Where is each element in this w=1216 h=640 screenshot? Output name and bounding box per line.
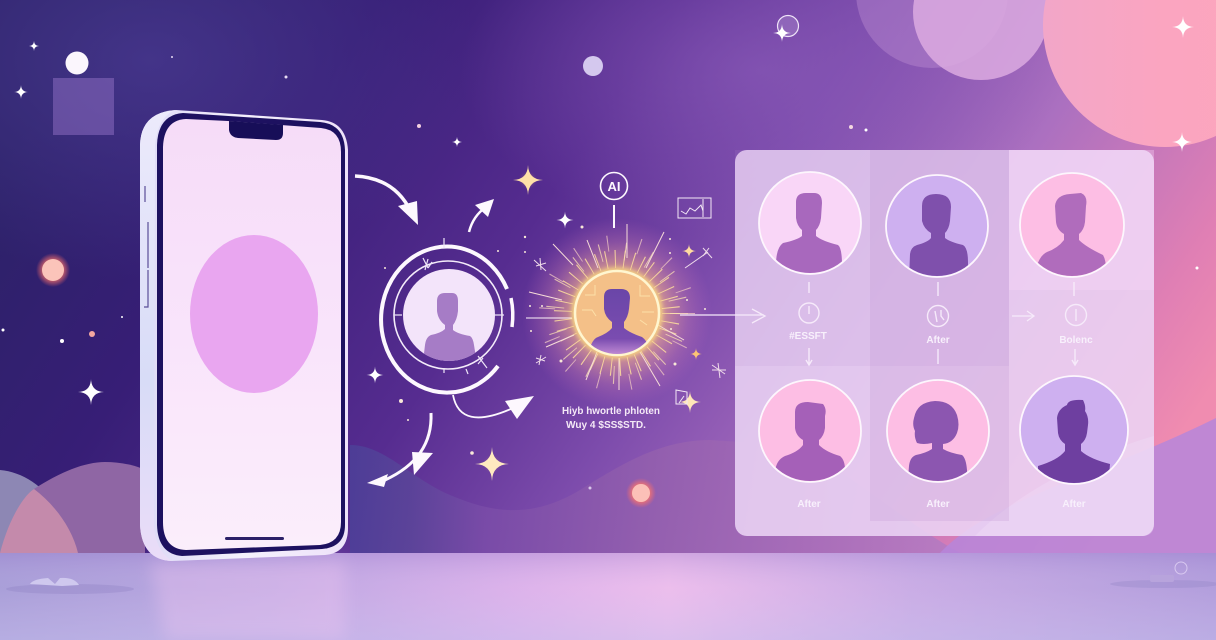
ring ticks: [394, 238, 504, 374]
arrow: down and left: [367, 413, 433, 487]
middle ring: [394, 261, 502, 369]
AI glow core: [526, 224, 703, 400]
panel wave: [975, 436, 1154, 536]
arrow: under ring to the right: [453, 395, 534, 419]
bokeh dots: [2, 16, 1198, 508]
sparkle dots around core: [384, 226, 706, 455]
portrait 4: [759, 380, 861, 490]
phone bezel: [157, 113, 345, 556]
outer ring: [381, 247, 507, 393]
phone notch: [229, 121, 283, 140]
AI badge: [600, 172, 628, 228]
AI badge: AI: [608, 179, 620, 194]
before profile ring: [381, 238, 513, 393]
after label 2: After: [926, 499, 950, 510]
right column tint: [1009, 150, 1154, 290]
step 2 label: After: [926, 335, 950, 346]
panel background: [735, 150, 1154, 536]
top row tint: [735, 150, 1009, 366]
phone: [140, 110, 348, 561]
caption text: Hiyb hwortle phloten: [562, 405, 660, 417]
radial rays short: [563, 259, 671, 367]
decorative bokeh square: [53, 78, 114, 135]
arrow: up right from ring: [469, 199, 494, 232]
step 1 label: #ESSFT: [789, 331, 827, 342]
image icon bottom: [676, 390, 687, 404]
phone side edge: [140, 110, 176, 561]
glowing ring: [574, 270, 660, 356]
phone body: [140, 110, 348, 561]
phone side buttons: [144, 186, 148, 307]
small x sparkles: [534, 248, 726, 378]
silhouette: [591, 289, 646, 354]
portrait 1: [759, 172, 861, 280]
phone screen: [163, 119, 341, 550]
floor object left: [6, 578, 134, 594]
step 1 connector: [799, 282, 819, 365]
portrait 5: [887, 380, 989, 490]
arrow: core to results: [680, 309, 765, 323]
caption text: [562, 405, 660, 431]
phone reflection: [150, 560, 345, 640]
radial rays medium: [555, 251, 679, 375]
inner avatar disc: [403, 269, 495, 361]
sparkles: [14, 16, 1194, 481]
portrait 2: [886, 175, 988, 280]
results panel: [735, 150, 1154, 536]
middle column tint: [870, 150, 1009, 521]
avatar silhouette: [424, 293, 476, 361]
arrow: curved into ring: [355, 176, 418, 225]
background soft shapes: [0, 0, 1216, 280]
after label 3: After: [1062, 499, 1086, 510]
phone home bar: [225, 537, 284, 540]
circuit lines: [582, 285, 654, 325]
background hills: [0, 418, 1216, 553]
step 2 connector: [928, 282, 948, 364]
caption text: Wuy 4 $SS$STD.: [566, 419, 646, 431]
portrait 3: [1020, 173, 1124, 285]
portrait 6: [1020, 376, 1128, 490]
step 3 label: Bolenc: [1059, 335, 1093, 346]
long rays: [526, 224, 684, 390]
image icon top: [678, 198, 711, 218]
step 3 connector: [1066, 282, 1086, 365]
floor object right: [1110, 562, 1216, 588]
arrow: between columns: [1012, 311, 1034, 321]
after label 1: After: [797, 499, 821, 510]
phone avatar placeholder: [190, 235, 318, 393]
outer ring segment: [511, 298, 513, 327]
radial rays long: [547, 243, 687, 383]
floor: [0, 553, 1216, 640]
